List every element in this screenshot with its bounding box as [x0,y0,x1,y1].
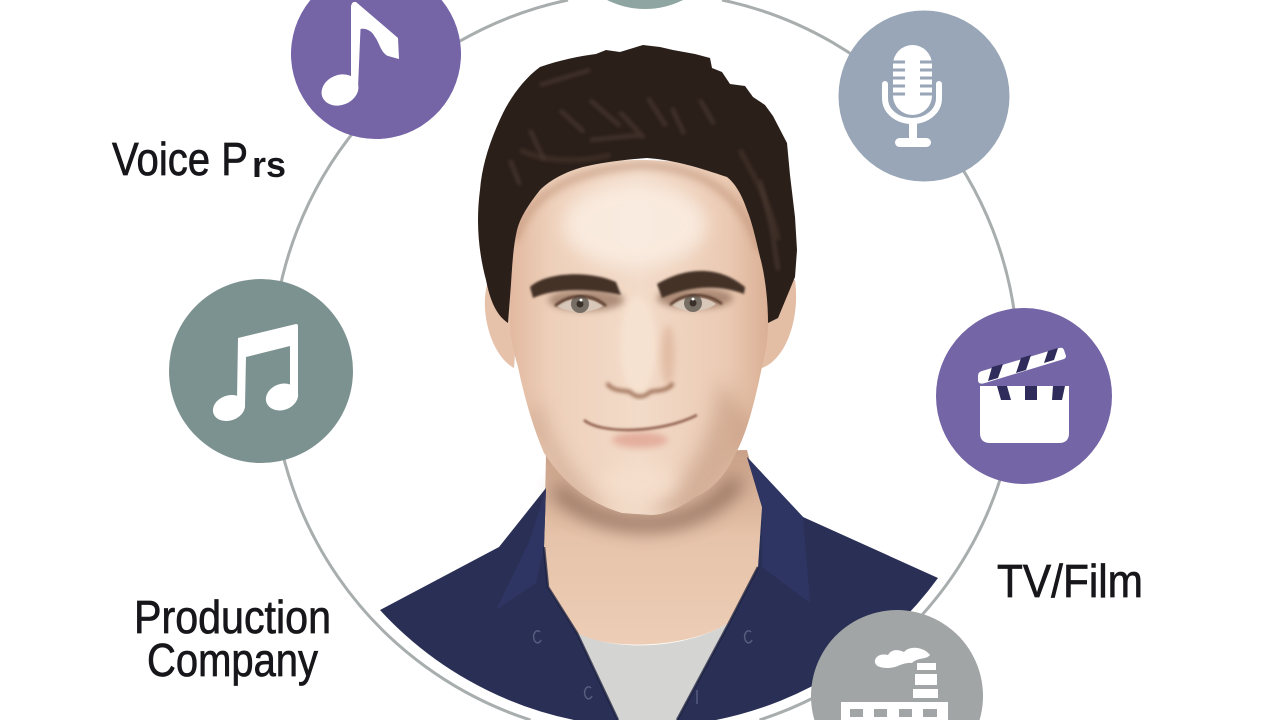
portrait of young man [380,45,938,720]
hair [478,45,797,323]
chin highlight [654,476,678,498]
node: factory [811,610,983,720]
label: Production Company: Company [147,634,318,686]
label: Voice Pros: Voice P [112,133,248,185]
icon: clapperboard [978,348,1069,443]
grey undershirt [577,623,729,720]
connecting ring [272,0,1018,720]
node: microphone [838,10,1010,182]
node: teal top (partly off-canvas) [607,0,683,9]
icon: double music note [209,324,302,425]
shirt buttons [534,631,752,704]
shirt collar [496,488,546,610]
jaw shading [652,385,751,514]
icon: single music note [317,2,399,111]
node: teal music notes [169,279,353,463]
node: clapperboard [936,308,1112,484]
face [510,160,768,515]
neck [544,450,762,645]
mouth [584,415,697,448]
label: Production Company: Production [134,591,331,643]
label: Voice Pros: rs [252,144,286,185]
label: TV/Film: TV/Film [997,555,1143,607]
icon: factory [841,648,948,720]
eye socket shadows [548,289,624,311]
shadow under chin [556,480,738,524]
node: purple music note [291,0,461,139]
hairline shadow [515,165,760,250]
ears [485,285,520,368]
label: Production Company [134,591,331,686]
nose [607,297,675,396]
navy shirt [380,457,938,720]
icon: microphone [885,45,939,147]
hair strands [510,70,778,270]
forehead highlight [563,183,707,267]
eyebrows [530,274,621,298]
eyes [555,294,722,313]
